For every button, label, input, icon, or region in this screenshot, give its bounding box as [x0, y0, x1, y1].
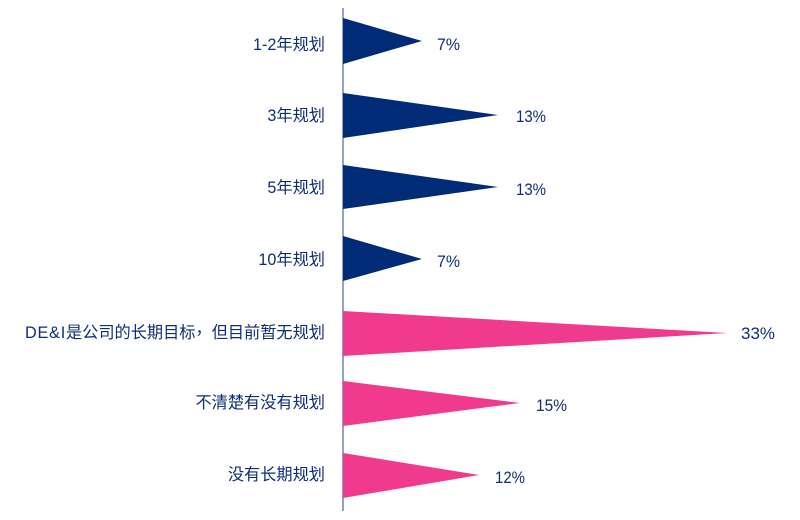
row: long-term goal without plan: 但目前暂无规划 [212, 324, 325, 342]
row: 3 year plan [267, 93, 546, 138]
row: 10 year plan: 10年规划 [258, 251, 325, 269]
row: 5 year plan: 13% [516, 181, 546, 199]
row: 10 year plan: 7% [437, 253, 460, 271]
row: 1-2 year plan: 1-2年规划 [253, 36, 325, 54]
row: unclear whether planned: 15% [536, 397, 567, 415]
row: 3 year plan: 3年规划 [267, 107, 325, 125]
row: unclear whether planned [196, 381, 567, 426]
row: unclear whether planned: 不清楚有没有规划 [196, 394, 325, 412]
row: long-term goal without plan: ， [196, 320, 212, 338]
row: 3 year plan: 13% [516, 108, 546, 126]
row: long-term goal without plan: DE&I是公司的长期目标 [25, 324, 196, 342]
row: 5 year plan [267, 165, 546, 209]
vertical axis [342, 8, 344, 511]
row: no long-term plan: 没有长期规划 [228, 466, 325, 484]
row: 5 year plan: 5年规划 [267, 179, 325, 197]
row: long-term goal without plan: 33% [741, 325, 775, 343]
row: 1-2 year plan: 7% [437, 36, 460, 54]
row: 1-2 year plan [253, 18, 460, 64]
row: 10 year plan [258, 236, 460, 281]
row: no long-term plan [228, 453, 525, 498]
row: long-term goal without plan [25, 311, 775, 356]
row: no long-term plan: 12% [495, 469, 525, 487]
